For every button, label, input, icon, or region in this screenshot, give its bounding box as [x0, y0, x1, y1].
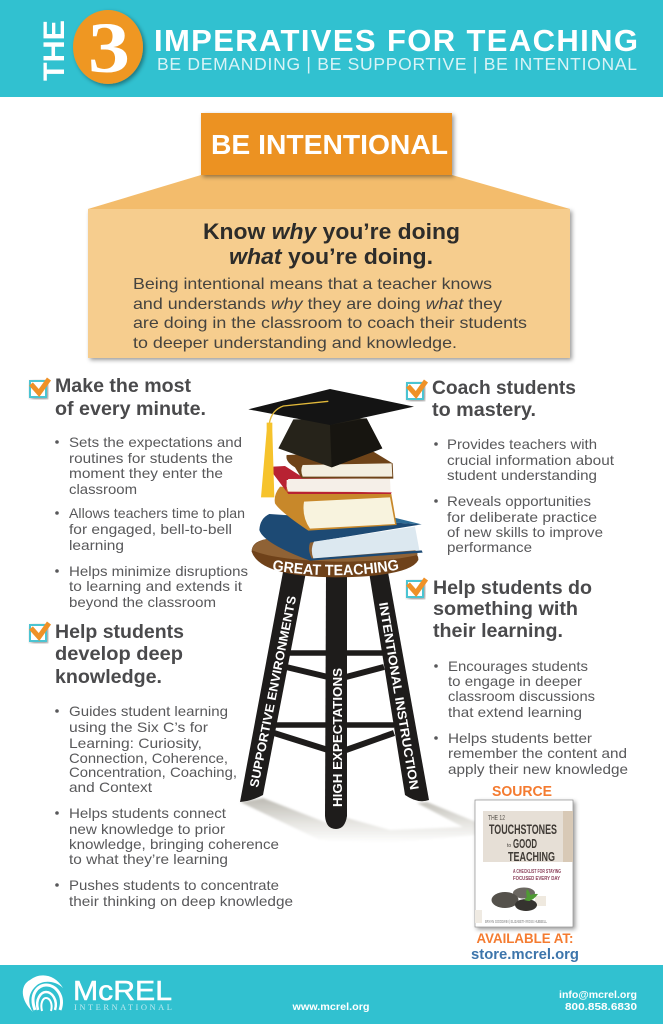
leg label: supportive environments: SUPPORTIVE ENVIRONMENTS — [247, 595, 299, 789]
book cover: THE 12 — [488, 815, 505, 822]
heading: their learning. — [433, 621, 563, 642]
bullet list: crucial information about — [447, 453, 614, 468]
panel: be intentional callout — [88, 113, 570, 358]
callout heading — [203, 219, 460, 269]
header title: IMPERATIVES FOR TEACHING — [154, 23, 638, 58]
book cover: BRYAN GOODWIN | ELIZABETH ROSS HUBBELL — [485, 919, 547, 924]
bullet list: that extend learning — [448, 705, 582, 720]
panel: coach students to mastery — [407, 378, 614, 555]
heading — [432, 378, 576, 421]
bullet list: and Context — [69, 780, 152, 795]
stool left leg — [240, 572, 306, 802]
stool seat — [252, 538, 418, 577]
book: brown top — [286, 452, 393, 479]
heading: to mastery. — [432, 400, 536, 421]
bullet list: of new skills to improve — [447, 525, 603, 540]
floor shadow of stool — [240, 798, 476, 843]
heading — [433, 578, 592, 642]
book cover: FOCUSED EVERY DAY — [513, 876, 560, 882]
icon: checkbox — [30, 379, 49, 397]
heading — [55, 376, 206, 420]
bullet list: apply their new knowledge — [448, 762, 628, 777]
callout lower box — [88, 209, 570, 358]
bullet list: Allows teachers time to plan — [69, 506, 245, 521]
bullet list: Provides teachers with — [447, 437, 597, 452]
bullet list: Helps students better — [448, 731, 592, 746]
bullet list: to learning and extends it — [69, 579, 242, 594]
heading: Make the most — [55, 376, 192, 397]
source label: SOURCE — [492, 784, 552, 800]
graduation cap — [248, 389, 414, 497]
contact details: 800.858.6830 — [565, 1001, 637, 1013]
bullet list — [434, 659, 628, 777]
contact details: info@mcrel.org — [559, 989, 637, 1001]
callout body text — [133, 276, 527, 352]
callout body text: and understands why they are doing what they — [133, 296, 502, 313]
panel: make the most of every minute — [30, 376, 248, 610]
bullet list: student understanding — [447, 468, 597, 483]
heading — [55, 622, 184, 688]
bullet list: to what they’re learning — [69, 852, 228, 867]
panel: source book — [471, 784, 579, 963]
bullet list: Helps minimize disruptions — [69, 564, 248, 579]
logo subtitle: INTERNATIONAL — [74, 1002, 172, 1012]
callout trapezoid — [88, 175, 570, 209]
bullet list: Helps students connect — [69, 806, 226, 821]
seat label: great teaching — [273, 560, 398, 576]
book cover: A CHECKLIST FOR STAYING — [513, 869, 561, 875]
bullet list: classroom discussions — [448, 689, 595, 704]
bullet list: their thinking on deep knowledge — [69, 894, 293, 909]
book: gold — [275, 487, 397, 531]
bullet list: Reveals opportunities — [447, 494, 591, 509]
book cover — [475, 800, 573, 927]
bullet list — [55, 704, 293, 909]
icon: checkbox — [30, 623, 49, 641]
callout body text: to deeper understanding and knowledge. — [133, 335, 457, 352]
book cover: to — [507, 843, 511, 849]
bullet list: beyond the classroom — [69, 595, 216, 610]
orange oval with number 3 — [73, 8, 143, 88]
bullet list: for engaged, bell-to-bell — [69, 522, 232, 537]
seat label: great teaching: GREAT TEACHING — [273, 560, 398, 576]
bullet list: Sets the expectations and — [69, 435, 242, 450]
callout body text: Being intentional means that a teacher knows — [133, 276, 492, 293]
cap tassel — [269, 401, 328, 423]
heading: develop deep — [55, 644, 183, 665]
bullet list: Concentration, Coaching, — [69, 765, 237, 780]
bullet list: for deliberate practice — [447, 510, 597, 525]
panel: help students develop deep knowledge — [30, 622, 293, 909]
header banner — [0, 0, 663, 97]
orange oval with number 3: 3 — [88, 8, 130, 88]
icon: McREL logo — [23, 975, 63, 1012]
book cover: TOUCHSTONES — [489, 821, 557, 837]
bullet list: performance — [447, 540, 532, 555]
book: blue — [259, 514, 423, 561]
callout body text: are doing in the classroom to coach their students — [133, 315, 527, 332]
bullet list: Guides student learning — [69, 704, 228, 719]
bullet list — [434, 437, 614, 555]
bullet list: Connection, Coherence, — [69, 751, 228, 766]
heading: something with — [433, 599, 578, 620]
bullet list: new knowledge to prior — [69, 822, 225, 837]
book cover: GOOD — [513, 836, 537, 851]
stool center leg — [325, 572, 347, 829]
leg label: intentional instruction: INTENTIONAL INSTRUCTION — [376, 601, 421, 791]
bullet list: Pushes students to concentrate — [69, 878, 279, 893]
heading: knowledge. — [55, 667, 162, 688]
callout title: BE INTENTIONAL — [211, 129, 448, 160]
heading: Help students — [55, 622, 184, 643]
bullet list — [55, 435, 248, 610]
header subtitle: BE DEMANDING | BE SUPPORTIVE | BE INTENTIONAL — [157, 54, 637, 74]
panel: help students do something with their learning — [407, 578, 628, 777]
heading: of every minute. — [55, 399, 206, 420]
bullet list: using the Six C’s for — [69, 720, 208, 735]
bullet list: moment they enter the — [69, 466, 223, 481]
bullet list: knowledge, bringing coherence — [69, 837, 279, 852]
icon: checkbox — [407, 381, 426, 399]
icon: checkbox — [407, 579, 426, 597]
orange title tab — [201, 113, 452, 175]
illustration: stool with books and cap — [240, 389, 429, 829]
vertical word THE: THE — [38, 20, 71, 81]
bullet list: routines for students the — [69, 451, 233, 466]
bullet list: Encourages students — [448, 659, 588, 674]
heading: Help students do — [433, 578, 592, 599]
stool rungs — [274, 653, 394, 750]
callout heading: Know why you’re doing — [203, 219, 460, 244]
bullet list: to engage in deeper — [448, 674, 582, 689]
contact details — [559, 989, 637, 1013]
footer banner — [0, 965, 663, 1024]
bullet list: classroom — [69, 482, 137, 497]
available at label: AVAILABLE AT: — [476, 931, 574, 946]
bullet list: remember the content and — [448, 746, 627, 761]
heading: Coach students — [432, 378, 576, 399]
callout heading: what you’re doing. — [229, 244, 433, 269]
website: www.mcrel.org — [291, 1001, 370, 1013]
logo wordmark: McREL — [73, 975, 172, 1006]
stool right leg — [369, 572, 429, 801]
bullet list: learning — [69, 538, 124, 553]
leg label: high expectations: HIGH EXPECTATIONS — [331, 668, 345, 807]
store link: store.mcrel.org — [471, 947, 579, 963]
bullet list: Learning: Curiosity, — [69, 736, 202, 751]
book cover: TEACHING — [508, 849, 555, 864]
book: red — [273, 466, 393, 494]
